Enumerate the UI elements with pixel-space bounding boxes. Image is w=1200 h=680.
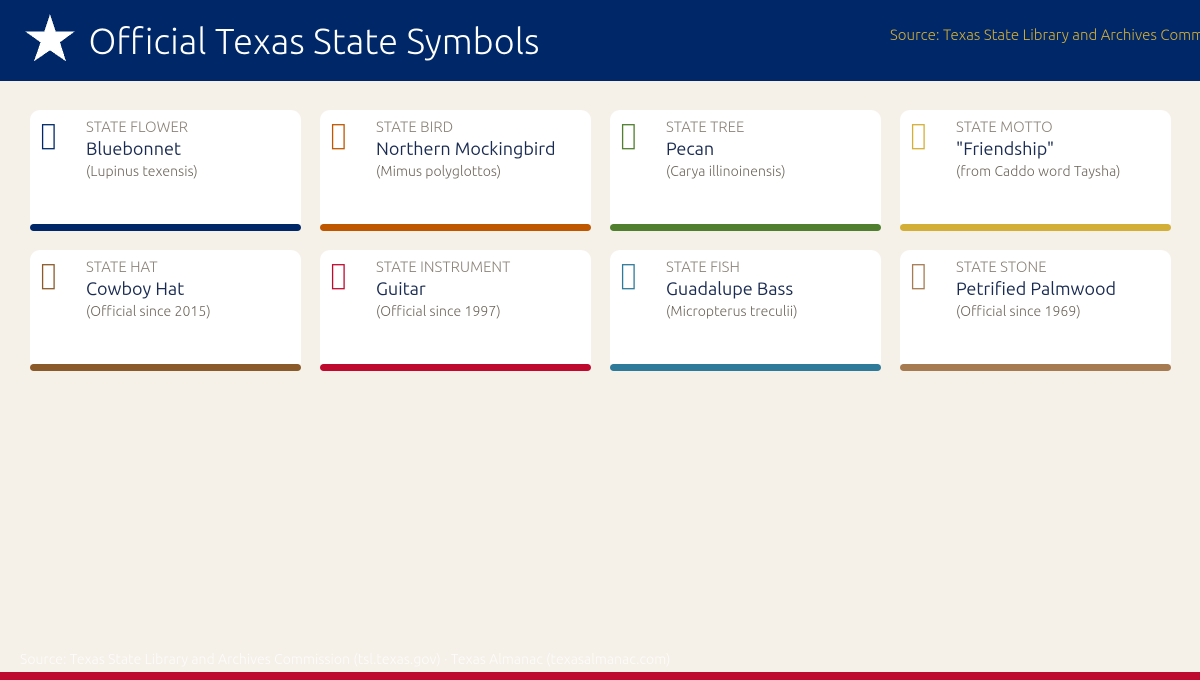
symbol name: Guadalupe Bass [666,279,793,299]
symbol name: Guitar [376,279,426,299]
icon: motto placeholder [912,124,925,150]
category label: STATE BIRD [376,118,453,135]
symbol detail: (Micropterus treculii) [666,303,798,319]
panel: state fish [610,250,881,371]
icon: guitar placeholder [332,264,345,290]
symbol detail: (from Caddo word Taysha) [956,163,1120,179]
accent bar [900,364,1171,371]
icon: flower placeholder [42,124,55,150]
panel: state motto [900,110,1171,231]
panel: state tree [610,110,881,231]
panel: state bird [320,110,591,231]
panel: state stone [900,250,1171,371]
symbol name: Bluebonnet [86,139,181,159]
symbol name: "Friendship" [956,139,1054,159]
icon: tree placeholder [622,124,635,150]
icon: white star [26,14,74,61]
accent bar [30,224,301,231]
accent bar [30,364,301,371]
category label: STATE HAT [86,258,158,275]
accent bar [610,224,881,231]
panel: state hat [30,250,301,371]
icon: hat placeholder [42,264,55,290]
category label: STATE FLOWER [86,118,188,135]
symbol name: Pecan [666,139,714,159]
panel: state flower [30,110,301,231]
symbol detail: (Official since 1997) [376,303,501,319]
icon: bird placeholder [332,124,345,150]
symbol name: Cowboy Hat [86,279,184,299]
symbol detail: (Carya illinoinensis) [666,163,786,179]
icon: stone placeholder [912,264,925,290]
footer source text: Source: Texas State Library and Archives Commission (tsl.texas.gov) · Texas Almanac (texasalmanac.com) [20,651,670,667]
accent bar [900,224,1171,231]
footer red strip [0,672,1200,680]
category label: STATE INSTRUMENT [376,258,510,275]
symbol detail: (Mimus polyglottos) [376,163,501,179]
accent bar [610,364,881,371]
symbol name: Petrified Palmwood [956,279,1116,299]
category label: STATE STONE [956,258,1047,275]
symbol detail: (Official since 1969) [956,303,1081,319]
title: Official Texas State Symbols [88,20,540,61]
symbol detail: (Lupinus texensis) [86,163,198,179]
category label: STATE TREE [666,118,744,135]
category label: STATE FISH [666,258,740,275]
symbol detail: (Official since 2015) [86,303,211,319]
symbol name: Northern Mockingbird [376,139,556,159]
panel: state instrument [320,250,591,371]
category label: STATE MOTTO [956,118,1053,135]
icon: fish placeholder [622,264,635,290]
accent bar [320,224,591,231]
accent bar [320,364,591,371]
header banner [0,0,1200,81]
